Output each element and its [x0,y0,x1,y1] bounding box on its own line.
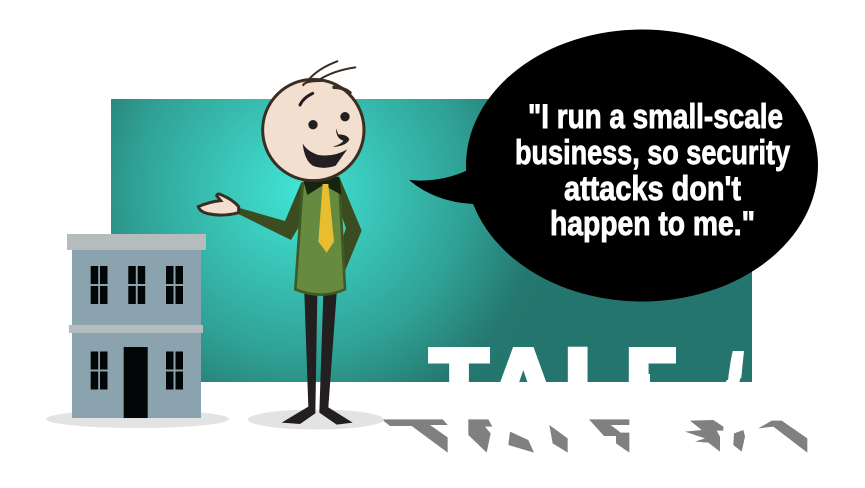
character: smiling man [198,61,364,295]
quote text: attacks don't [564,170,741,208]
panel: teal gradient background [111,99,752,382]
eyes [308,112,350,129]
green shirt [295,183,345,295]
quote text: "I run a small-scale [528,98,783,136]
icon: two-storey building [67,234,206,418]
head [263,79,364,181]
quote text: happen to me." [550,205,755,243]
collar [303,177,342,195]
left eyebrow [300,93,313,105]
bubble tail [409,170,480,210]
arm and hand pointing left [198,182,305,240]
quote text: business, so security [515,134,790,172]
title: partially visible white lettering: TALE# [430,330,770,436]
open mouth [303,143,347,168]
speech bubble [409,30,818,302]
character ground shadow [248,410,384,430]
arm on hip [333,178,362,275]
nose [333,128,349,147]
title shadow: grey extruded fragments [382,419,807,453]
legs and shoes [282,293,353,425]
building ground shadow [46,410,229,428]
yellow tie [318,184,334,253]
hair strands [303,61,355,93]
quote text [515,98,790,243]
